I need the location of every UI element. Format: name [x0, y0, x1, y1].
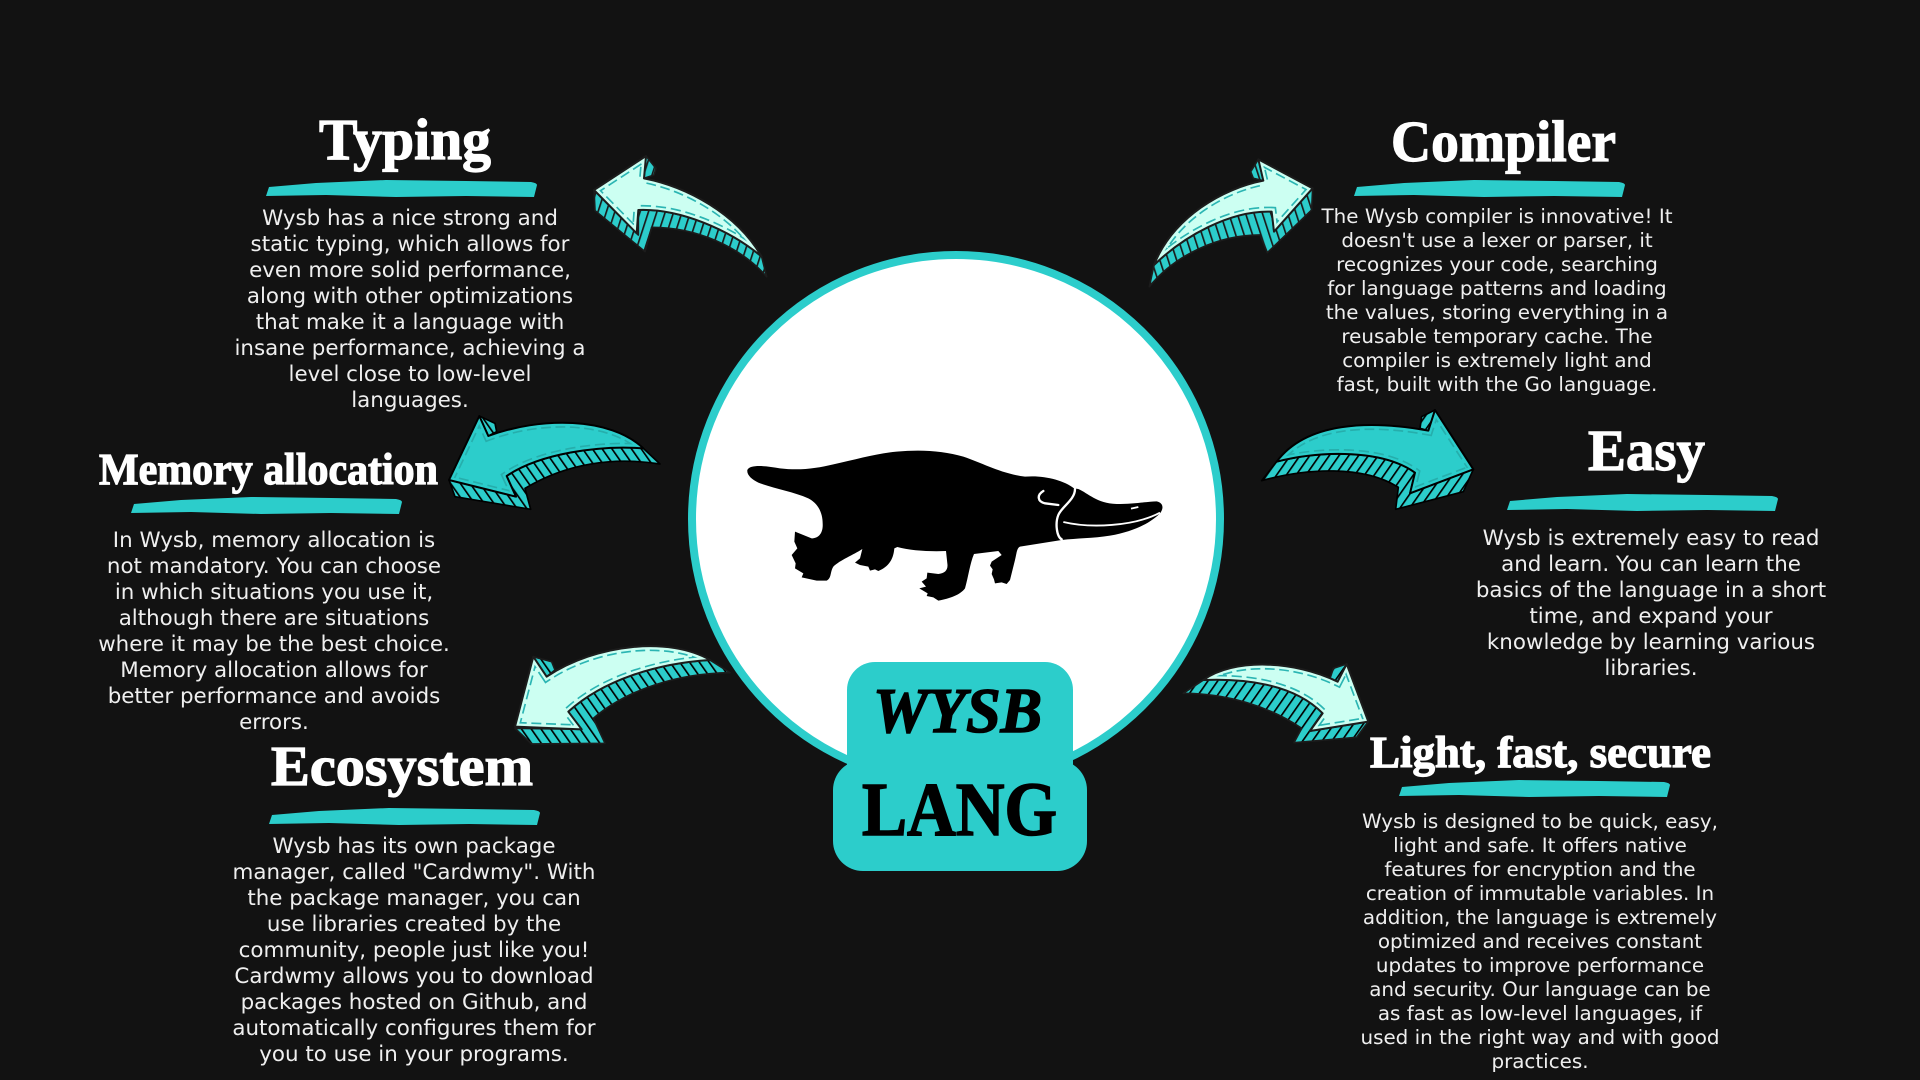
- text: Ecosystem: you to use in your programs.: [259, 1042, 569, 1067]
- badge: WYSB LANG: [833, 662, 1087, 871]
- text: Ecosystem: manager, called "Cardwmy". With: [233, 860, 595, 885]
- text: Typing: languages.: [351, 388, 469, 413]
- text: Memory allocation: In Wysb, memory allocation is: [113, 528, 435, 553]
- text: Light, fast, secure: updates to improve performance: [1376, 954, 1704, 977]
- text: Light, fast, secure: as fast as low-level languages, if: [1378, 1002, 1703, 1025]
- text: Easy: time, and expand your: [1529, 604, 1773, 629]
- arrow: towards Light, fast, secure: [1183, 664, 1368, 743]
- heading: Typing: Typing: [319, 107, 491, 172]
- text: Ecosystem: [232, 834, 596, 1067]
- text: Compiler: reusable temporary cache. The: [1341, 325, 1653, 348]
- text: Easy: libraries.: [1604, 656, 1698, 681]
- heading underline: Compiler: [1354, 180, 1625, 197]
- text: Easy: Wysb is extremely easy to read: [1483, 526, 1819, 551]
- heading: Light, fast, secure: Light, fast, secure: [1370, 728, 1711, 777]
- text: Memory allocation: not mandatory. You can choose: [107, 554, 441, 579]
- arrow: towards Memory allocation: [449, 416, 660, 509]
- text: Easy: [1476, 526, 1826, 681]
- text: Memory allocation: Memory allocation allows for: [120, 658, 428, 683]
- panel: Typing: [234, 107, 586, 413]
- text: Light, fast, secure: optimized and receives constant: [1378, 930, 1702, 953]
- text: Compiler: fast, built with the Go language.: [1337, 373, 1657, 396]
- heading: Easy: Easy: [1588, 418, 1705, 483]
- text: Easy: and learn. You can learn the: [1501, 552, 1801, 577]
- text: Typing: insane performance, achieving a: [234, 336, 586, 361]
- text: Light, fast, secure: creation of immutable variables. In: [1366, 882, 1714, 905]
- text: Memory allocation: where it may be the best choice.: [98, 632, 450, 657]
- arrow: towards Typing: [594, 156, 767, 277]
- panel: Light, fast, secure: [1360, 728, 1720, 1073]
- text: Compiler: compiler is extremely light and: [1342, 349, 1652, 372]
- text: Typing: static typing, which allows for: [251, 232, 570, 257]
- heading underline: Memory allocation: [131, 497, 402, 514]
- text: Ecosystem: Cardwmy allows you to download: [234, 964, 594, 989]
- text: Light, fast, secure: light and safe. It offers native: [1393, 834, 1687, 857]
- badge: LANG box: [833, 760, 1087, 871]
- text: Light, fast, secure: and security. Our language can be: [1369, 978, 1711, 1001]
- badge: WYSB box: [847, 662, 1073, 792]
- text: Compiler: recognizes your code, searching: [1336, 253, 1658, 276]
- central white circle: [692, 255, 1220, 783]
- panel: Easy: [1476, 418, 1826, 681]
- text: Typing: [234, 206, 586, 413]
- panel: Memory allocation: [98, 445, 450, 735]
- text: Compiler: for language patterns and loading: [1327, 277, 1667, 300]
- panel: Compiler: [1320, 109, 1673, 396]
- text: Compiler: doesn't use a lexer or parser, it: [1341, 229, 1653, 252]
- heading underline: Easy: [1507, 494, 1778, 511]
- text: Easy: basics of the language in a short: [1476, 578, 1826, 603]
- heading underline: Light, fast, secure: [1399, 780, 1670, 797]
- text: Ecosystem: Wysb has its own package: [272, 834, 556, 859]
- text: Light, fast, secure: [1360, 810, 1720, 1073]
- text: Typing: Wysb has a nice strong and: [262, 206, 558, 231]
- heading underline: Ecosystem: [269, 808, 540, 825]
- text: Compiler: the values, storing everything in a: [1326, 301, 1668, 324]
- text: Light, fast, secure: practices.: [1491, 1050, 1589, 1073]
- heading: Compiler: Compiler: [1391, 109, 1616, 174]
- text: Memory allocation: [98, 528, 450, 735]
- arrow: towards Ecosystem: [515, 646, 730, 744]
- text: Memory allocation: errors.: [239, 710, 309, 735]
- text: Memory allocation: better performance and avoids: [108, 684, 440, 709]
- text: Ecosystem: the package manager, you can: [247, 886, 581, 911]
- text: Light, fast, secure: used in the right way and with good: [1360, 1026, 1720, 1049]
- text: Light, fast, secure: features for encryption and the: [1384, 858, 1696, 881]
- heading: Ecosystem: Ecosystem: [271, 736, 533, 798]
- heading underline: Typing: [266, 180, 537, 197]
- heading: Memory allocation: Memory allocation: [99, 445, 438, 494]
- badge text: LANG: LANG: [862, 768, 1057, 852]
- text: Typing: even more solid performance,: [249, 258, 571, 283]
- text: Ecosystem: packages hosted on Github, and: [241, 990, 587, 1015]
- text: Ecosystem: community, people just like you!: [239, 938, 589, 963]
- text: Ecosystem: use libraries created by the: [267, 912, 561, 937]
- text: Compiler: [1320, 205, 1673, 396]
- text: Ecosystem: automatically configures them for: [232, 1016, 596, 1041]
- text: Light, fast, secure: Wysb is designed to be quick, easy,: [1362, 810, 1718, 833]
- text: Typing: level close to low-level: [289, 362, 531, 387]
- icon: platypus silhouette: [747, 451, 1162, 601]
- text: Memory allocation: although there are situations: [119, 606, 429, 631]
- text: Compiler: The Wysb compiler is innovative! It: [1320, 205, 1673, 228]
- text: Typing: that make it a language with: [256, 310, 564, 335]
- text: Memory allocation: in which situations you use it,: [115, 580, 433, 605]
- arrow: towards Easy: [1262, 410, 1473, 509]
- panel: Ecosystem: [232, 736, 596, 1067]
- arrow: towards Compiler: [1149, 159, 1313, 287]
- badge text: WYSB: WYSB: [873, 675, 1042, 746]
- text: Light, fast, secure: addition, the language is extremely: [1363, 906, 1717, 929]
- text: Easy: knowledge by learning various: [1487, 630, 1815, 655]
- text: Typing: along with other optimizations: [247, 284, 573, 309]
